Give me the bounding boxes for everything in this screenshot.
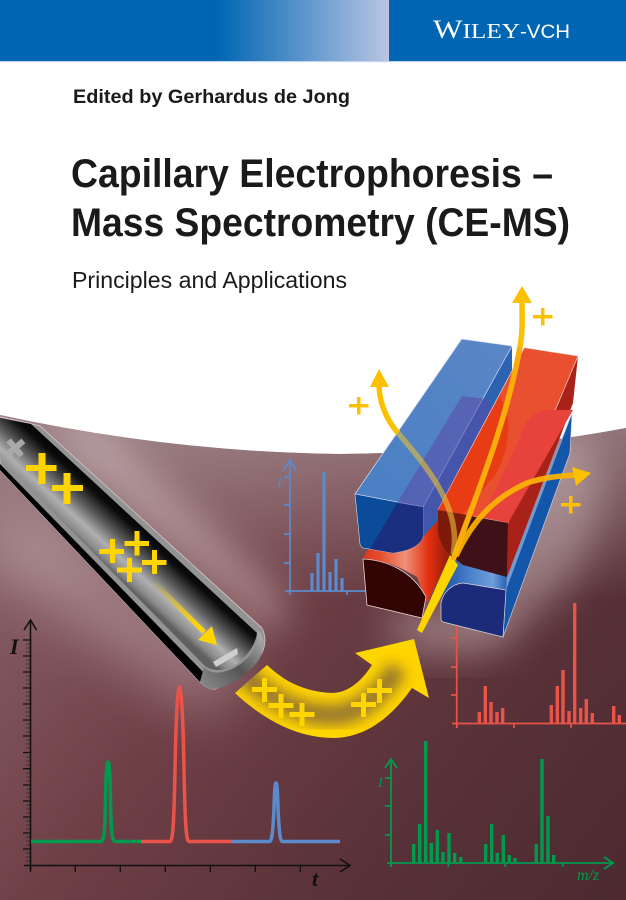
- quadrupole mass analyser: [349, 286, 591, 637]
- publisher logo: WILEY: [433, 15, 520, 44]
- publisher logo: [433, 15, 570, 44]
- chromatogram axes: [23, 620, 350, 872]
- chart: chromatogram: [9, 620, 350, 891]
- yellow ion beam and trajectories: [379, 303, 576, 633]
- chart: green mass spectrum: [377, 741, 613, 884]
- lower maroon backdrop: [0, 409, 626, 900]
- header band: [0, 0, 626, 62]
- title: [71, 152, 570, 245]
- axis label I: I: [9, 634, 20, 659]
- curved arrow: [235, 639, 429, 738]
- gray charge marker: [0, 433, 30, 463]
- title: Capillary Electrophoresis –: [71, 152, 553, 196]
- tube black lower edge: [0, 464, 203, 682]
- red peak: [141, 687, 231, 842]
- publisher logo: -VCH: [520, 22, 570, 43]
- plus signs: [349, 308, 580, 514]
- lower blue rod: [441, 413, 572, 637]
- blue peak: [231, 783, 340, 842]
- positive ions in arrow: [252, 678, 392, 726]
- chart: blue mass spectrum: I: [276, 476, 283, 491]
- chart: green mass spectrum: m/z: [577, 867, 600, 884]
- tube interior: [0, 418, 257, 670]
- title: Mass Spectrometry (CE-MS): [71, 201, 570, 245]
- upper red rod: [438, 348, 578, 577]
- tube mouth rim: [200, 630, 264, 689]
- upper blue rod: [355, 339, 512, 553]
- editor line: Edited by Gerhardus de Jong: [73, 87, 350, 108]
- tube outer gray wall: [0, 417, 265, 689]
- chart: blue mass spectrum: [276, 460, 372, 595]
- detector window: [213, 648, 238, 667]
- arrow heads: [370, 286, 591, 486]
- chart: red mass spectrum: [451, 603, 626, 728]
- green peak: [31, 762, 141, 842]
- positive ions in tube: [26, 453, 166, 582]
- axis label t: t: [312, 866, 319, 891]
- lower red rod: [363, 500, 450, 618]
- subtitle: Principles and Applications: [72, 267, 347, 293]
- capillary tube: [0, 417, 265, 689]
- migration arrow: [155, 583, 217, 645]
- chart: green mass spectrum: I: [377, 776, 384, 791]
